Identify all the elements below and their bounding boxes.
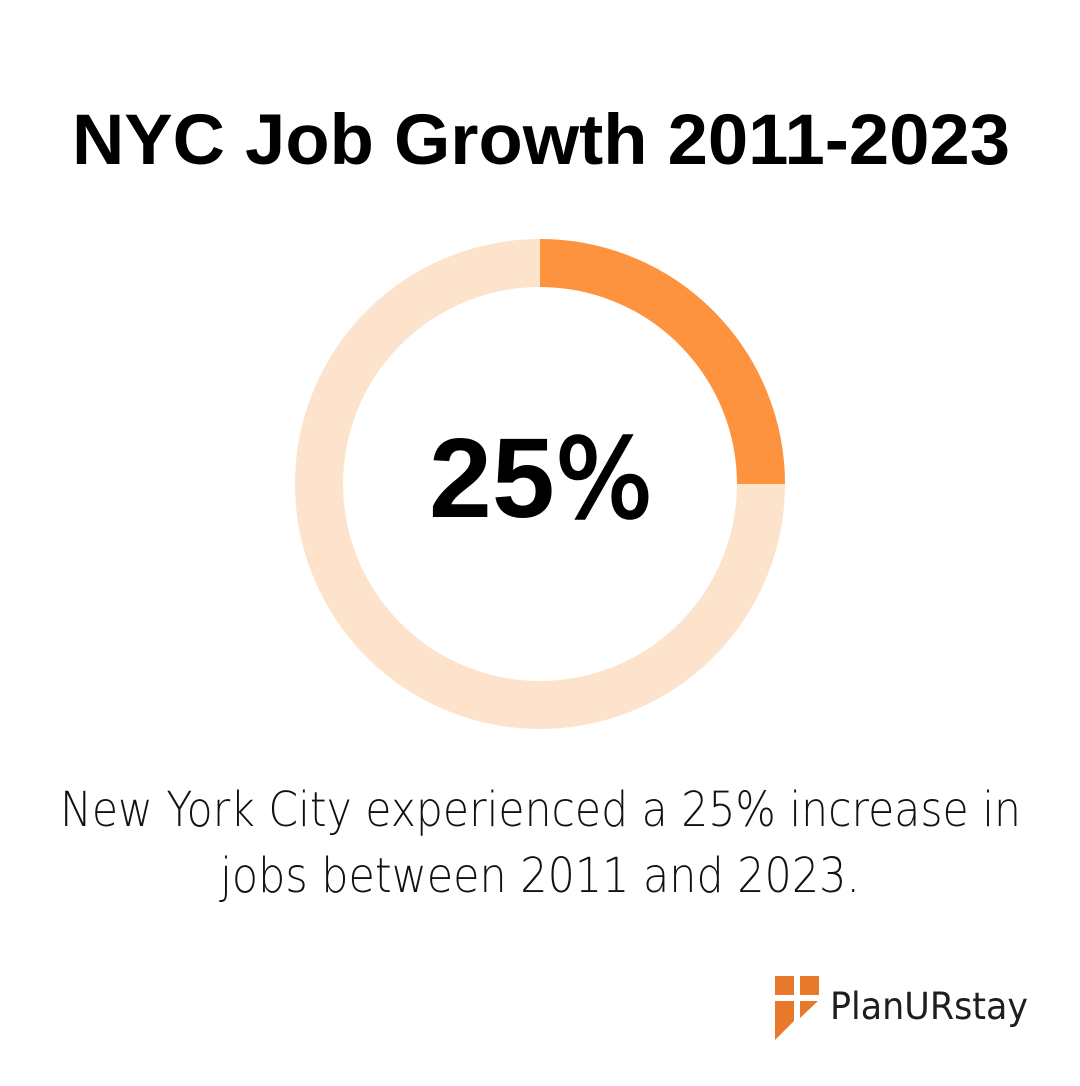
logo icon	[775, 976, 819, 1040]
center value: 25	[429, 415, 555, 541]
center value: %	[555, 415, 653, 543]
logo wordmark: PlanURstay	[830, 985, 1028, 1028]
description text	[60, 782, 1021, 904]
description text: jobs between 2011 and 2023.	[219, 848, 860, 904]
donut highlighted quarter	[540, 263, 761, 484]
donut track	[319, 263, 761, 705]
center value	[429, 415, 653, 543]
logo: PlanURstay	[775, 976, 1028, 1040]
donut chart: 25%	[319, 263, 761, 705]
title: NYC Job Growth 2011-2023	[72, 100, 1010, 180]
